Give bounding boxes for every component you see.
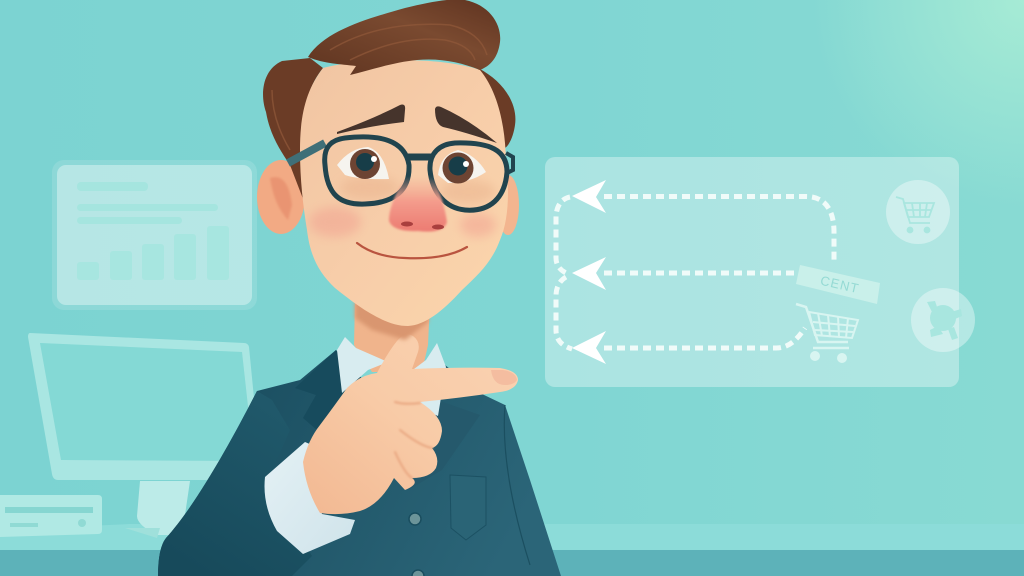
hair top <box>308 0 500 75</box>
arrow: middle <box>572 257 606 290</box>
arrow: top <box>572 180 606 213</box>
hair back left <box>263 58 323 204</box>
hand and pointing finger <box>303 334 518 514</box>
hair strands <box>272 24 487 150</box>
ear right <box>497 175 519 235</box>
chin shadow on neck <box>355 300 430 340</box>
mouth <box>357 243 467 258</box>
cent tag: CENT <box>819 273 861 296</box>
eyebrow right <box>435 106 497 143</box>
icon: keyboard box <box>0 495 102 537</box>
arrow: bottom <box>572 331 606 364</box>
icon: shopping cart <box>796 304 858 362</box>
cent tag <box>796 265 880 304</box>
shirt cuff <box>264 442 355 554</box>
nose <box>389 176 447 232</box>
hair back right <box>478 68 515 148</box>
jacket buttons <box>409 513 424 576</box>
panel: chart card <box>52 160 257 310</box>
cheeks <box>309 207 496 237</box>
desk surface <box>0 524 1024 576</box>
icon: award badge <box>911 288 975 352</box>
ear left <box>257 160 305 234</box>
bar chart <box>77 226 229 280</box>
icon: desktop monitor <box>28 333 262 538</box>
eye right <box>438 150 486 184</box>
panel: cart flow diagram <box>545 157 975 387</box>
glasses <box>288 137 513 210</box>
face <box>300 60 508 326</box>
icon: cart badge <box>886 180 950 244</box>
presenter character <box>158 0 561 576</box>
neck <box>354 300 430 372</box>
eyebrow left <box>337 105 405 134</box>
shirt collar <box>337 337 446 416</box>
dashed flow loops <box>556 196 834 349</box>
suit jacket <box>158 350 561 576</box>
eye left <box>337 147 389 179</box>
eye socket shading <box>340 176 496 204</box>
jacket pocket <box>450 475 486 540</box>
